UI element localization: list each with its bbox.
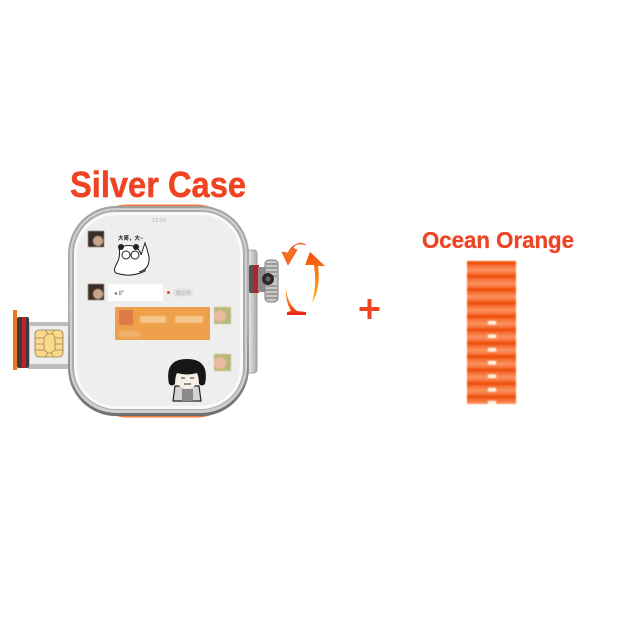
avatar right 1 (214, 307, 231, 324)
voice message bubble (108, 284, 193, 301)
crown (249, 260, 278, 302)
sticker: panda (114, 234, 149, 275)
sticker: panda: 大哥，大~ (118, 234, 143, 242)
SIM tray (13, 310, 72, 370)
sticker: mushroom hair boy (168, 359, 206, 401)
arrow down curved (286, 286, 306, 315)
tray cap (13, 310, 29, 370)
smartwatch (68, 204, 278, 418)
side button (240, 250, 257, 373)
avatar right 2 (214, 354, 231, 371)
plus sign (360, 299, 380, 319)
title: Silver Case: Silver Case (70, 164, 246, 205)
band holes (488, 321, 496, 404)
icon: SIM chip (35, 330, 63, 357)
voice message bubble: ◂ 8" (114, 291, 124, 297)
label: Ocean Orange: Ocean Orange (422, 227, 574, 253)
chat avatar 2 (88, 284, 104, 300)
voice message bubble: 转文字 (176, 290, 191, 297)
watch band: ocean orange (467, 261, 516, 404)
chat avatar 1 (88, 231, 104, 247)
arrow up (305, 252, 325, 303)
time: 13:04 (152, 218, 166, 224)
blurred orange message (115, 307, 210, 340)
rotation arrows (282, 243, 325, 315)
case (80, 204, 244, 418)
arrow left curved (282, 243, 306, 265)
